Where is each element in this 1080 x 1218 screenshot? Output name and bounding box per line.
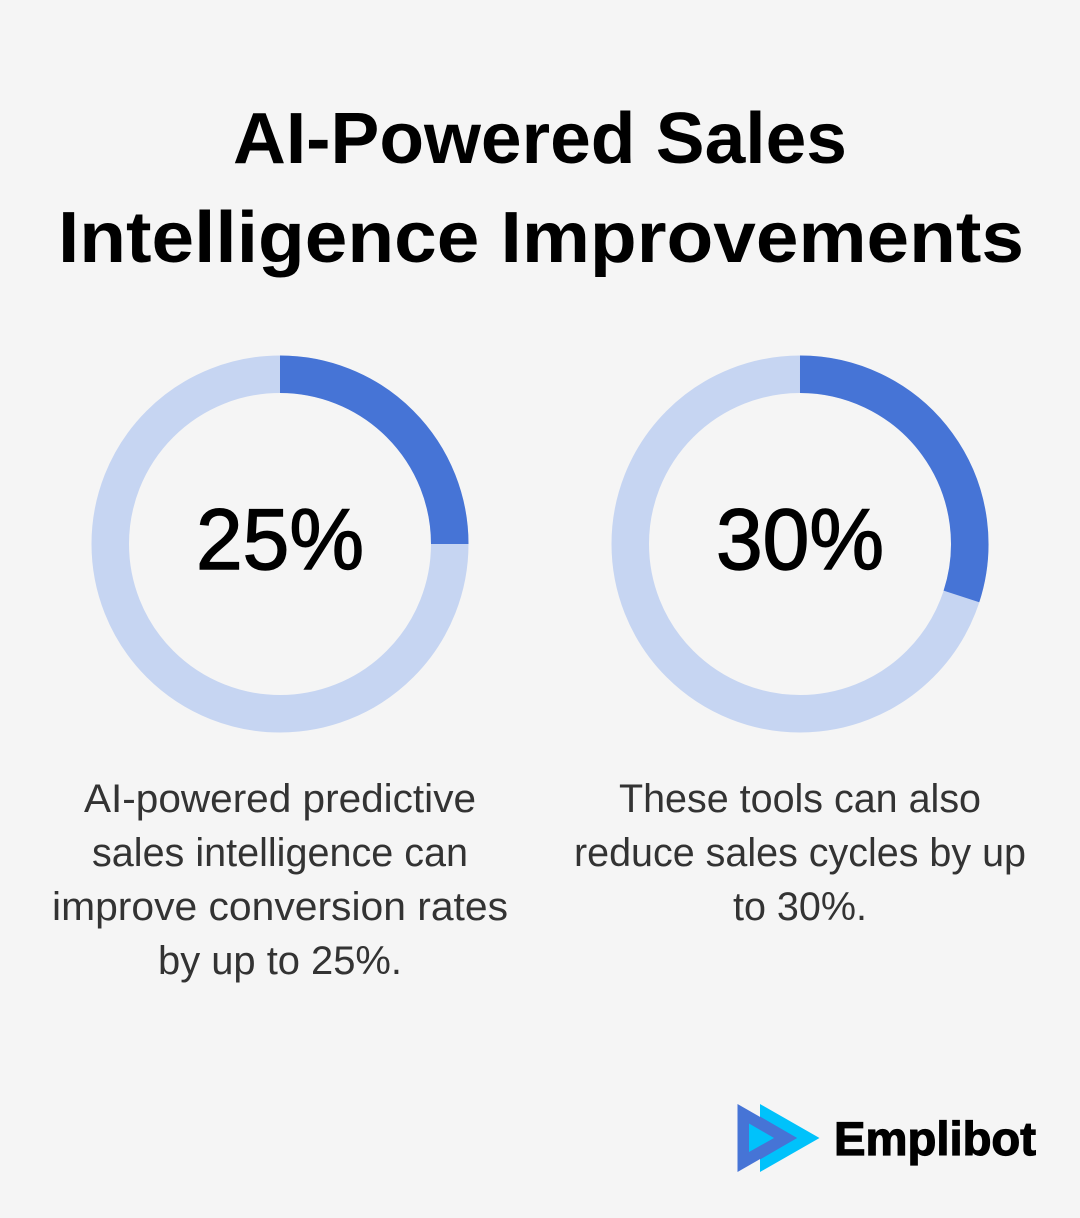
- description: conversion rates: [52, 777, 508, 983]
- icon: play triangles: [738, 1104, 820, 1172]
- panel: 25% conversion rate stat: [52, 374, 508, 983]
- description: sales cycles: to 30%.: [733, 885, 867, 929]
- description: conversion rates: improve conversion rates: [52, 885, 508, 929]
- title: [58, 99, 1024, 278]
- logo: Emplibot: [738, 1104, 1036, 1172]
- wordmark: Emplibot: [834, 1112, 1036, 1165]
- description: sales cycles: These tools can also: [619, 777, 981, 821]
- donut value: 25%: 25%: [196, 492, 364, 588]
- description: sales cycles: reduce sales cycles by up: [574, 831, 1026, 875]
- donut value: 30%: 30%: [716, 492, 884, 588]
- donut chart: 25%: [110, 374, 450, 714]
- description: conversion rates: by up to 25%.: [158, 939, 402, 983]
- description: conversion rates: AI-powered predictive: [84, 777, 476, 821]
- title: AI-Powered Sales: [233, 99, 847, 179]
- description: conversion rates: sales intelligence can: [92, 831, 468, 875]
- description: sales cycles: [574, 777, 1026, 929]
- title: Intelligence Improvements: [58, 198, 1024, 278]
- donut chart: 30%: [630, 374, 970, 714]
- panel: 30% sales cycle stat: [574, 374, 1026, 929]
